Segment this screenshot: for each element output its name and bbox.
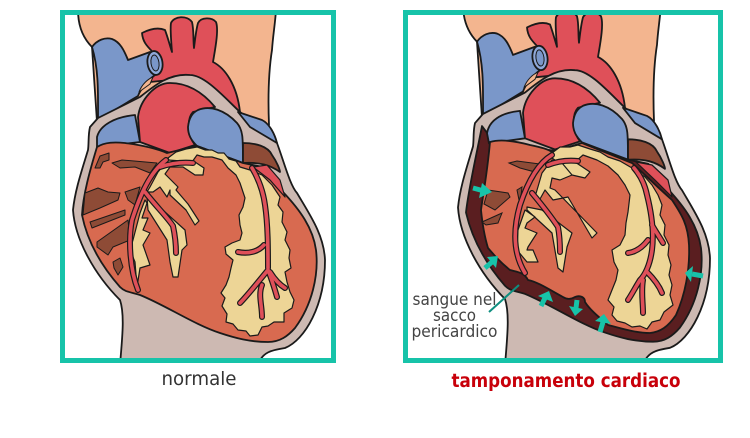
arrow: bottom one [538, 291, 553, 306]
skin gap [524, 72, 538, 87]
illustration: normal heart [73, 10, 325, 365]
left atrium [97, 115, 140, 147]
red appendage [253, 165, 285, 197]
frame: normal [62, 12, 334, 360]
skin gap [139, 77, 153, 92]
callout: blood in sac: pericardico [412, 322, 498, 342]
red appendage [636, 162, 672, 197]
label: normale: normale [162, 368, 236, 390]
leader line [489, 285, 519, 312]
neck skin [463, 4, 661, 121]
pulmonary vein [92, 38, 155, 120]
pericardium [458, 70, 710, 365]
arrow: right [685, 266, 703, 282]
callout: blood in sac [412, 290, 498, 342]
neck skin [78, 10, 276, 125]
brown appendage [243, 143, 280, 172]
pulmonary vein [477, 33, 540, 116]
arrow: upper left [473, 183, 492, 198]
pericardium [73, 75, 325, 365]
label: tamponamento cardiaco: tamponamento cardiaco [452, 371, 680, 392]
arrow: bottom three [595, 314, 611, 332]
right upper blue vessel [623, 108, 662, 139]
brown appendage [628, 139, 665, 169]
blood in pericardial sac [466, 126, 702, 342]
right upper blue vessel [238, 112, 277, 143]
left heart brown patches [83, 153, 157, 275]
coronary arteries [515, 155, 663, 313]
frame: tamponade [406, 12, 720, 360]
right atrium [188, 108, 243, 163]
cream fingers [517, 160, 597, 272]
illustration: tamponade heart [458, 4, 710, 365]
compression arrows [473, 183, 703, 332]
vessel ring [146, 50, 164, 76]
compressed heart body [481, 141, 689, 333]
arrow: bottom two, inward bump [569, 300, 583, 316]
aorta arch [527, 11, 625, 108]
vessel ring [531, 45, 549, 71]
aorta arch [142, 17, 240, 112]
left atrium [487, 111, 525, 143]
heart body [82, 142, 317, 342]
right atrium [573, 104, 628, 160]
ascending aorta [523, 78, 600, 150]
panel: cardiac tamponade [406, 4, 720, 392]
cream fat band and patch [552, 145, 673, 329]
panel: normal heart [62, 10, 334, 390]
callout: blood in sac: sacco [433, 306, 476, 326]
cream fingers [130, 160, 204, 287]
coronary arteries [130, 160, 285, 317]
callout: blood in sac: sangue nel [412, 290, 496, 310]
arrow: lower left [485, 256, 498, 268]
ascending aorta [138, 83, 215, 153]
cream fat band and patch [168, 147, 294, 336]
tamponade brown patches [482, 161, 540, 225]
